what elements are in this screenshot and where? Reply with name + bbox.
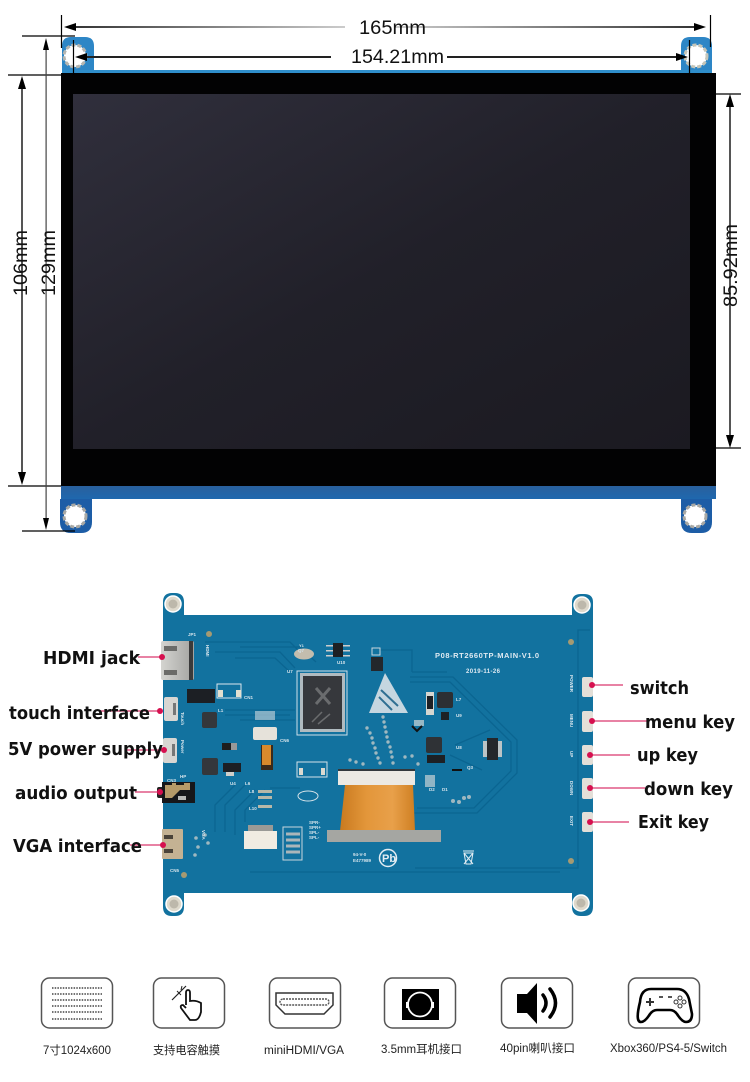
silkscreen component labels: SPL- bbox=[309, 835, 320, 840]
traces bbox=[205, 630, 590, 872]
caption: 40pin喇叭接口 bbox=[500, 1041, 575, 1055]
label: switch: switch bbox=[630, 678, 689, 699]
caption: 支持电容触摸 bbox=[153, 1043, 220, 1057]
dimension label: 106mm: 106mm bbox=[11, 230, 32, 296]
label: HDMI jack: HDMI jack bbox=[43, 648, 141, 669]
key silkscreen labels bbox=[569, 675, 574, 826]
icon: HDMI port bbox=[270, 978, 340, 1028]
caption: Xbox360/PS4-5/Switch bbox=[610, 1043, 727, 1055]
feature: game consoles bbox=[610, 978, 727, 1055]
silkscreen component labels: CN6 bbox=[280, 738, 289, 743]
dimension label: 85.92mm: 85.92mm bbox=[721, 224, 742, 307]
mounting holes, back bbox=[165, 596, 590, 912]
icon: speaker bbox=[502, 978, 572, 1028]
silkscreen component labels: Q7 bbox=[298, 648, 305, 653]
VGA connector bbox=[162, 829, 183, 859]
label: down key: down key bbox=[644, 779, 733, 800]
icon: touch hand bbox=[154, 978, 224, 1028]
mounting tabs, front bbox=[60, 37, 712, 533]
silkscreen component labels: HP bbox=[180, 774, 186, 779]
panel: back view circuit board bbox=[157, 593, 593, 916]
silkscreen component labels: CN5 bbox=[170, 868, 179, 873]
key silkscreen labels: POWER bbox=[569, 675, 574, 693]
feature: resolution bbox=[42, 978, 112, 1057]
label: menu key: menu key bbox=[645, 712, 735, 733]
arrow: 106mm bbox=[18, 76, 26, 485]
tactile keys bbox=[582, 677, 593, 832]
silkscreen component labels: U9 bbox=[456, 713, 462, 718]
silkscreen component labels: Q3 bbox=[467, 765, 474, 770]
main chip bbox=[297, 671, 347, 735]
certification marks: Pb bbox=[382, 853, 396, 865]
silkscreen component labels: 94-V-0 bbox=[353, 852, 367, 857]
feature: speaker bbox=[500, 978, 575, 1055]
silkscreen component labels: L10 bbox=[249, 806, 257, 811]
caption: 7寸1024x600 bbox=[43, 1043, 111, 1057]
dimension label: 154.21mm: 154.21mm bbox=[351, 47, 444, 68]
arrow: 154.21mm bbox=[75, 53, 688, 61]
feature: capacitive touch bbox=[153, 978, 224, 1057]
caption: 3.5mm耳机接口 bbox=[381, 1042, 462, 1056]
blue top edge bbox=[62, 70, 712, 74]
label: Exit key: Exit key bbox=[638, 812, 709, 833]
dimension label: 165mm: 165mm bbox=[359, 18, 426, 39]
silkscreen component labels: L7 bbox=[456, 697, 462, 702]
silkscreen component labels: U8 bbox=[456, 745, 462, 750]
black bezel bbox=[61, 73, 716, 486]
silkscreen component labels: CN3 bbox=[167, 778, 176, 783]
label: up key: up key bbox=[637, 745, 698, 766]
touch micro USB bbox=[164, 697, 178, 721]
silkscreen component labels: HDMI bbox=[205, 645, 210, 656]
silkscreen component labels: U4 bbox=[230, 781, 236, 786]
ESD warning triangle bbox=[369, 673, 408, 713]
board date text: 2019-11-26 bbox=[466, 669, 501, 675]
dimension label: 129mm: 129mm bbox=[39, 230, 60, 296]
silkscreen component labels: Y1 bbox=[299, 643, 305, 648]
silkscreen component labels: CN1 bbox=[244, 695, 253, 700]
label: audio output: audio output bbox=[15, 783, 137, 804]
key silkscreen labels: DOWN bbox=[569, 781, 574, 795]
icon: pixel grid bbox=[42, 978, 112, 1028]
arrow: 85.92mm bbox=[726, 94, 734, 448]
label: VGA interface: VGA interface bbox=[13, 836, 142, 857]
power micro USB bbox=[163, 738, 177, 763]
grey stiffener bbox=[327, 830, 441, 842]
silkscreen component labels: SPL- bbox=[309, 830, 320, 835]
board model text: P08-RT2660TP-MAIN-V1.0 bbox=[435, 651, 539, 660]
silkscreen component labels: L1 bbox=[218, 708, 224, 713]
HDMI connector bbox=[161, 641, 194, 680]
silkscreen component labels: JP1 bbox=[188, 632, 197, 637]
silkscreen component labels: L8 bbox=[249, 789, 255, 794]
silkscreen component labels: D1 bbox=[442, 787, 448, 792]
small components bbox=[187, 643, 502, 860]
arrow: 165mm bbox=[64, 23, 706, 31]
audio jack bbox=[157, 782, 195, 803]
orange flex cable bbox=[340, 785, 415, 831]
panel: front view of display bbox=[60, 37, 716, 533]
feature: HDMI VGA bbox=[264, 978, 344, 1057]
label: 5V power supply: 5V power supply bbox=[8, 739, 163, 760]
silkscreen component labels: Touch bbox=[180, 712, 185, 725]
flat cable connector bbox=[338, 769, 415, 785]
blue bottom edge bbox=[61, 485, 716, 499]
key silkscreen labels: MENU bbox=[569, 714, 574, 727]
silkscreen component labels: SPR- bbox=[309, 820, 320, 825]
silkscreen component labels: D2 bbox=[429, 787, 435, 792]
feature: audio jack bbox=[381, 978, 462, 1056]
silkscreen component labels: L6 bbox=[245, 781, 251, 786]
board outline bbox=[163, 593, 593, 916]
silkscreen component labels: Power bbox=[180, 740, 185, 754]
silkscreen component labels: U7 bbox=[287, 669, 293, 674]
silkscreen component labels: E477989 bbox=[353, 858, 372, 863]
label: touch interface: touch interface bbox=[9, 703, 150, 724]
icon: gamepad bbox=[628, 978, 700, 1028]
silkscreen component labels: U10 bbox=[337, 660, 346, 665]
callout lines bbox=[100, 654, 647, 848]
screen bbox=[73, 94, 690, 449]
key silkscreen labels: UP bbox=[569, 751, 574, 757]
arrow: 129mm bbox=[43, 38, 49, 530]
silkscreen component labels bbox=[167, 632, 474, 873]
silkscreen component labels: SPR+ bbox=[309, 825, 321, 830]
caption: miniHDMI/VGA bbox=[264, 1045, 344, 1057]
silkscreen component labels: VGA bbox=[201, 830, 206, 841]
dimension lines bbox=[8, 15, 742, 531]
key silkscreen labels: EXIT bbox=[569, 816, 574, 826]
icon: 3.5mm jack bbox=[384, 978, 456, 1028]
certification marks bbox=[380, 850, 474, 866]
